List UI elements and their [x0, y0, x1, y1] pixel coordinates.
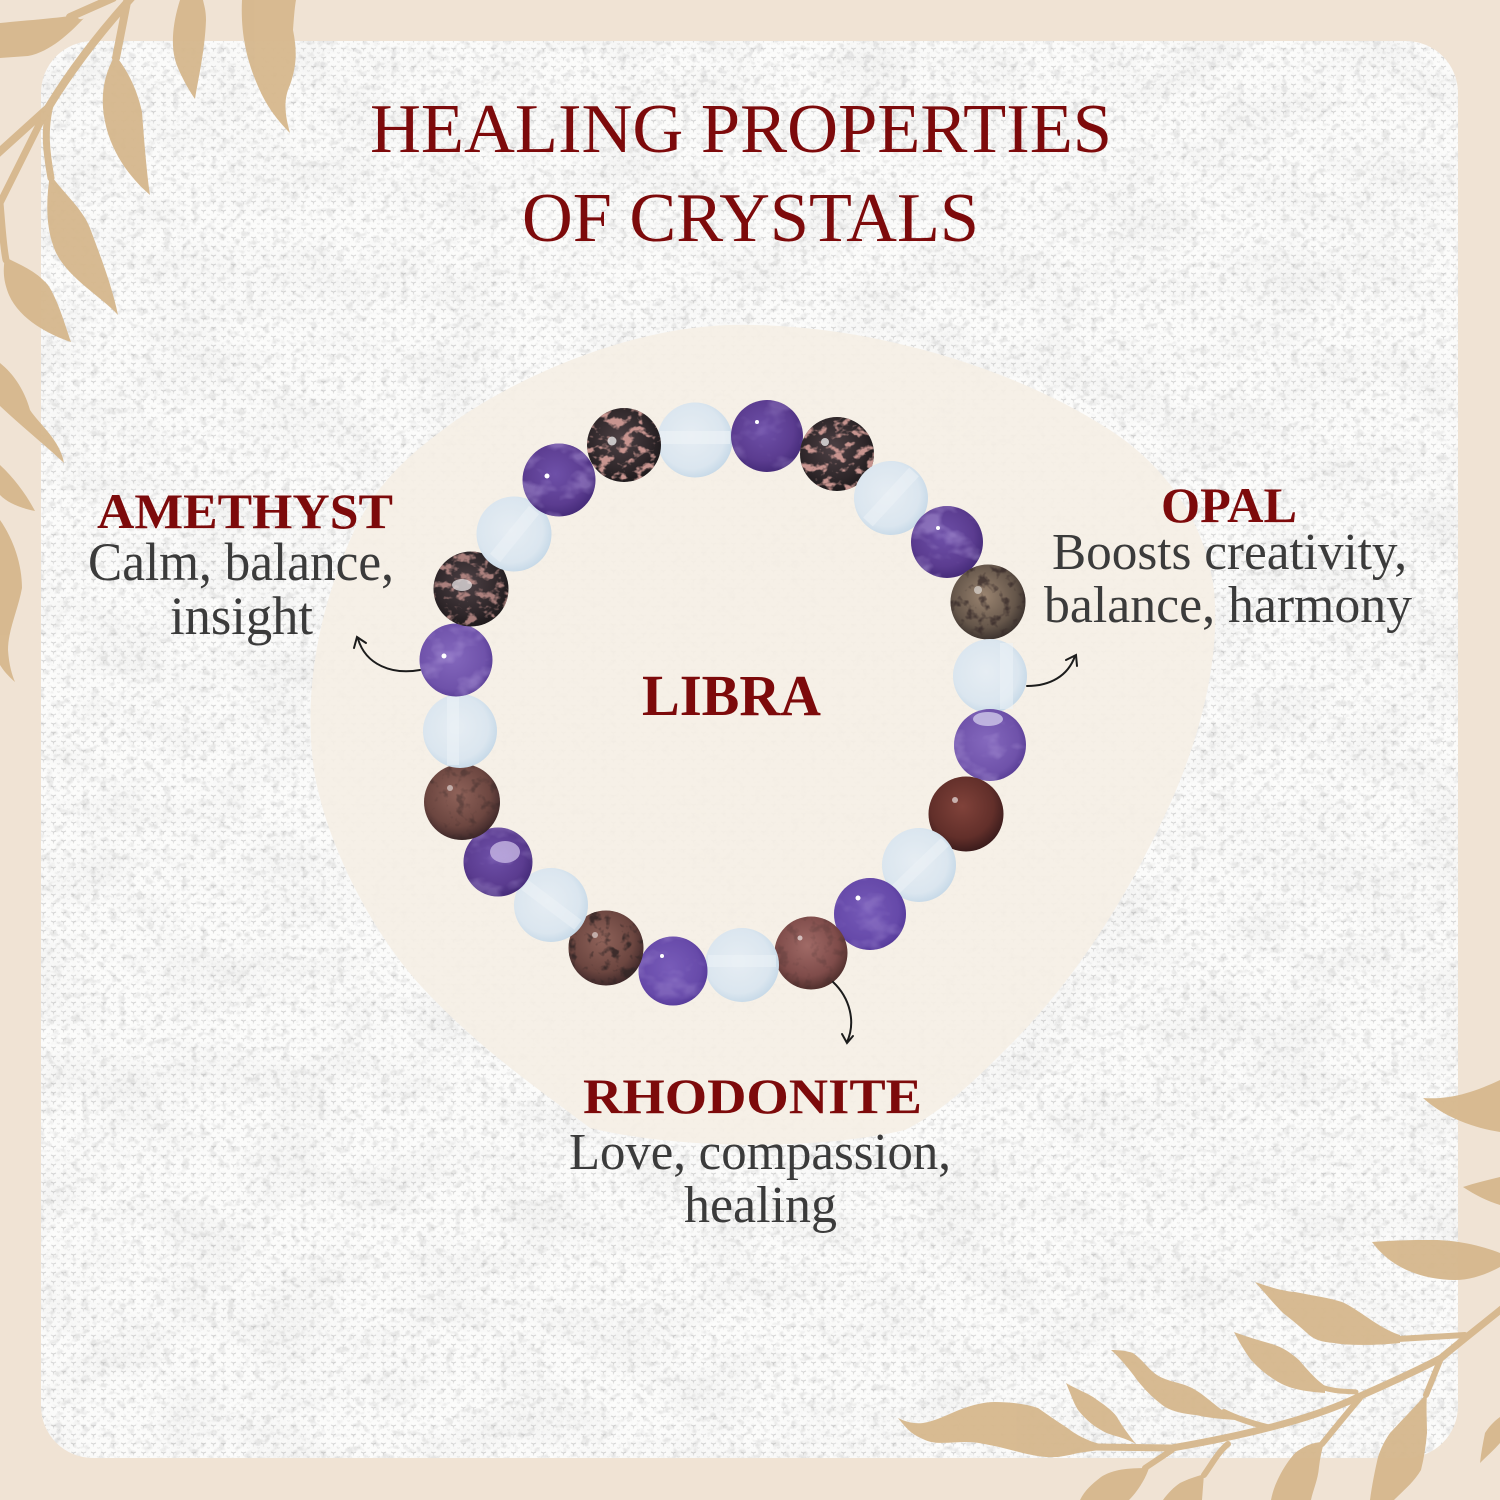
callout: amethyst: Calm, balance, — [88, 532, 394, 592]
callout: amethyst: AMETHYST — [97, 483, 393, 539]
bead: opal — [882, 828, 956, 902]
bead: opal — [658, 402, 732, 478]
callout: rhodonite: Love, compassion, — [569, 1124, 951, 1181]
bead: rhodonite — [800, 417, 874, 491]
arrow: rhodonite — [833, 982, 853, 1043]
bead: rhodonite — [434, 552, 508, 626]
bead: opal — [423, 694, 497, 768]
bead: rhodonite — [950, 564, 1026, 640]
callout: opal: OPAL — [1161, 477, 1297, 533]
callout: rhodonite: healing — [684, 1177, 837, 1234]
callout: opal: balance, harmony — [1044, 577, 1412, 634]
bead: amethyst — [420, 624, 492, 696]
bead: amethyst — [731, 400, 803, 472]
leaves: bottom-right branch — [898, 1080, 1500, 1500]
callout: opal: Boosts creativity, — [1052, 524, 1407, 581]
bead: opal — [854, 461, 928, 535]
callout: amethyst: insight — [170, 586, 313, 646]
bead: amethyst — [522, 444, 596, 516]
bead: amethyst — [834, 878, 906, 950]
bead: amethyst — [638, 936, 708, 1006]
bead: rhodonite — [587, 408, 661, 482]
callout: opal — [1044, 477, 1412, 634]
bracelet — [420, 400, 1027, 1006]
arrow: amethyst — [354, 637, 420, 671]
arrow: opal — [1027, 655, 1077, 686]
callout: amethyst — [88, 483, 394, 646]
bead: rhodonite — [774, 916, 848, 990]
bead: opal — [705, 928, 779, 1002]
title: OF CRYSTALS — [522, 180, 979, 257]
bead: rhodonite — [424, 764, 500, 840]
center label: Libra: LIBRA — [642, 663, 821, 728]
callout: rhodonite — [569, 1068, 951, 1234]
callout: rhodonite: RHODONITE — [583, 1068, 922, 1124]
bead: rhodonite — [928, 776, 1004, 852]
bead: opal — [476, 496, 552, 572]
bead: opal — [953, 639, 1027, 713]
title: HEALING PROPERTIES — [370, 91, 1112, 168]
title — [370, 91, 1112, 257]
bead: amethyst — [954, 709, 1026, 781]
leaves: top-left branch — [0, 0, 296, 682]
bead: amethyst — [911, 506, 983, 578]
bead: rhodonite — [568, 910, 644, 986]
bead: opal — [514, 868, 588, 942]
bead: amethyst — [464, 828, 532, 896]
beige blob backdrop — [310, 325, 1215, 1145]
